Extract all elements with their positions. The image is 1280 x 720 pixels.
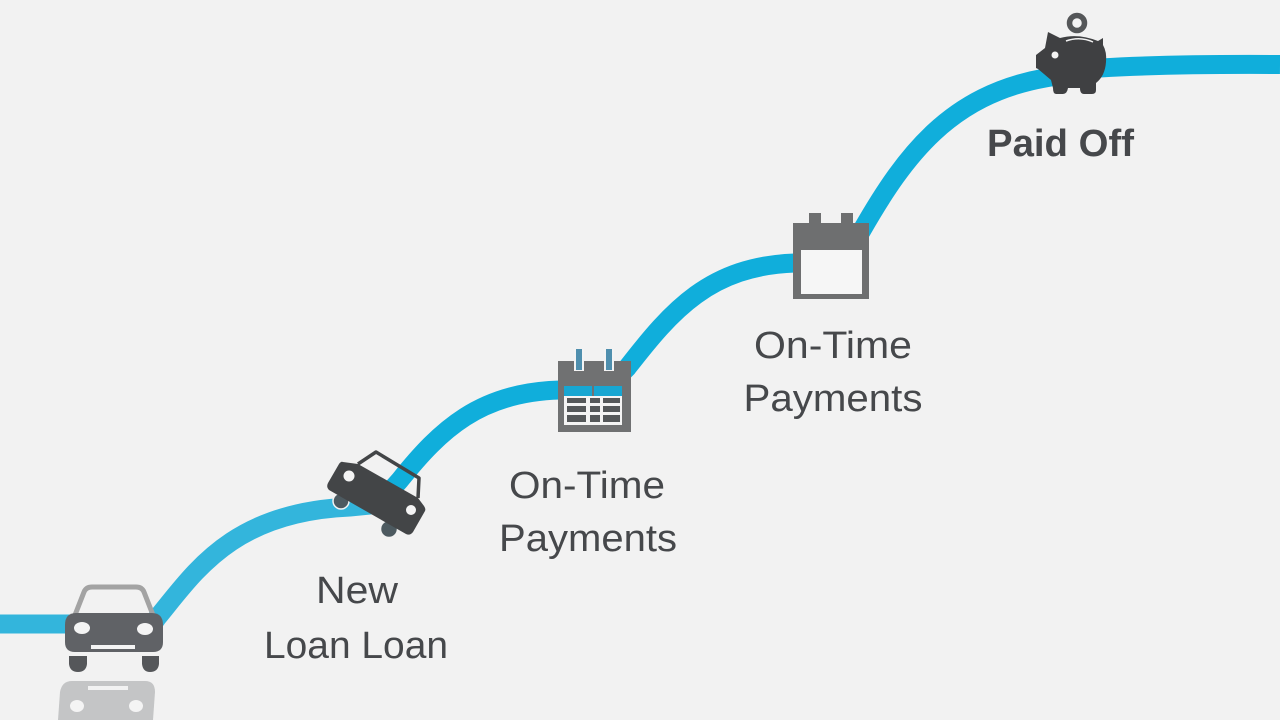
label: On-Time Payments (first) xyxy=(499,465,677,560)
label: On-Time Payments (first): Payments xyxy=(499,518,677,560)
icon: tilted car xyxy=(327,452,425,538)
icon: coin xyxy=(1070,16,1084,30)
label: New Loan Loan xyxy=(264,570,448,667)
label: Paid Off: Paid Off xyxy=(987,123,1134,165)
icon: blank calendar xyxy=(793,213,869,299)
icon: car front view xyxy=(65,587,163,672)
label: On-Time Payments (second) xyxy=(744,325,922,420)
icon: detailed calendar xyxy=(558,349,631,432)
label: On-Time Payments (second): Payments xyxy=(744,378,922,420)
loan progress curve xyxy=(0,64,1280,628)
label: New Loan Loan: New xyxy=(316,570,399,612)
icon: piggy bank xyxy=(1036,32,1106,94)
label: New Loan Loan: Loan Loan xyxy=(264,625,448,667)
label: On-Time Payments (first): On-Time xyxy=(509,465,665,507)
icon: car reflection xyxy=(58,681,155,720)
label: On-Time Payments (second): On-Time xyxy=(754,325,912,367)
